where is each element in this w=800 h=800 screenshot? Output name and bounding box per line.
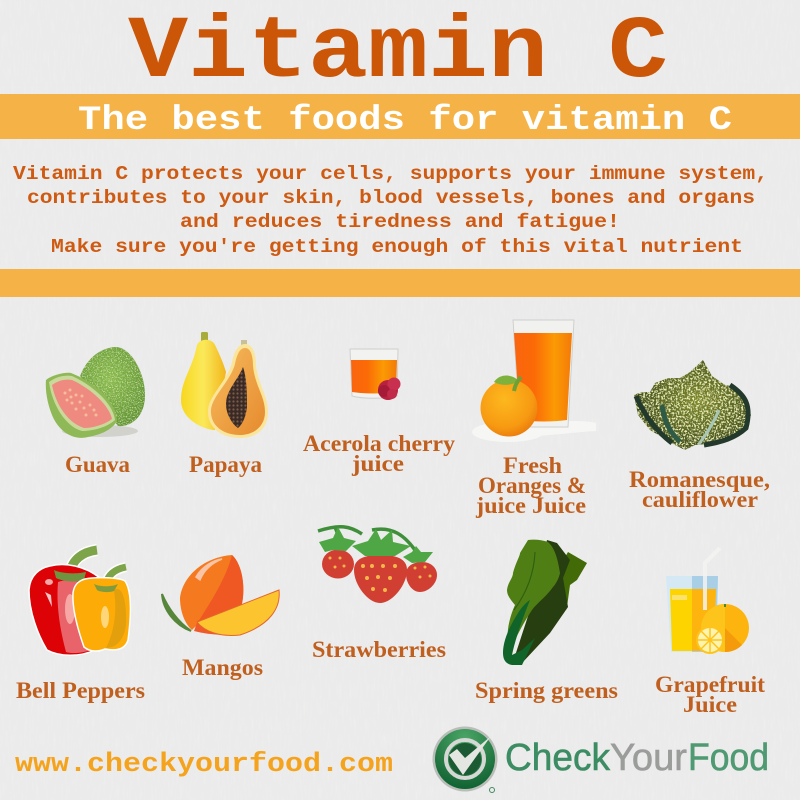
food item: strawberries [312, 527, 446, 662]
label: Fresh Oranges & juice Juice [475, 453, 586, 518]
label: Acerola cherry juice [303, 431, 456, 476]
label: Grapefruit Juice: Grapefruit [655, 672, 765, 697]
label: Acerola cherry juice: juice [351, 451, 404, 476]
label: Strawberries: Strawberries [312, 637, 446, 662]
banner: subtitle [0, 94, 800, 140]
icon: orange and juice glass [472, 320, 596, 442]
label: Fresh Oranges & juice Juice: juice Juice [475, 493, 586, 518]
food item: mangos [162, 555, 279, 680]
icon: logo badge [432, 726, 498, 792]
food item: spring greens [475, 540, 618, 703]
logo wordmark: Food [688, 737, 769, 779]
logo wordmark: Check [505, 737, 611, 779]
website url: www.checkyourfood.com [15, 750, 393, 780]
food item: bell peppers [16, 550, 145, 703]
logo wordmark: Your [610, 737, 687, 779]
icon: juice glass with berries [350, 349, 400, 400]
logo wordmark [505, 737, 769, 779]
label: Mangos: Mangos [182, 655, 263, 680]
label: Grapefruit Juice [655, 672, 765, 717]
food item: fresh oranges and juice [472, 320, 596, 518]
label: Romanesque, cauliflower: Romanesque, [629, 467, 770, 492]
icon: papaya [181, 332, 268, 438]
label: Fresh Oranges & juice Juice: Fresh [503, 453, 562, 478]
icon: romanesque [634, 360, 751, 450]
intro paragraph: Vitamin C protects your cells, supports your immune system, [13, 163, 768, 185]
label: Bell Peppers: Bell Peppers [16, 678, 145, 703]
food item: romanesque cauliflower [629, 360, 770, 512]
food item: grapefruit juice [655, 548, 765, 717]
label: Spring greens: Spring greens [475, 678, 618, 703]
label: Romanesque, cauliflower: cauliflower [642, 487, 758, 512]
banner: subtitle: The best foods for vitamin C [78, 102, 732, 140]
food item: acerola cherry juice [303, 349, 456, 476]
icon: grapefruit juice glass [666, 548, 749, 653]
icon: bell peppers [29, 550, 130, 655]
food item: guava [46, 347, 145, 477]
logo: CheckYourFood [432, 726, 769, 792]
orange divider band [0, 269, 800, 297]
icon: strawberries [318, 527, 437, 603]
icon: spring greens leaf [503, 540, 587, 665]
icon: mango [162, 555, 279, 635]
label: Papaya: Papaya [189, 452, 262, 477]
label: Grapefruit Juice: Juice [683, 692, 737, 717]
label: Fresh Oranges & juice Juice: Oranges & [478, 473, 586, 498]
intro paragraph [13, 163, 768, 258]
food item: papaya [181, 332, 268, 477]
intro paragraph: and reduces tiredness and fatigue! [180, 211, 620, 233]
label: Acerola cherry juice: Acerola cherry [303, 431, 456, 456]
label: Guava: Guava [65, 452, 130, 477]
label: Romanesque, cauliflower [629, 467, 770, 512]
intro paragraph: contributes to your skin, blood vessels, bones and organs [27, 187, 755, 209]
icon: guava [46, 347, 145, 438]
title: Vitamin C [128, 4, 668, 103]
intro paragraph: Make sure you're getting enough of this vital nutrient [51, 236, 743, 258]
